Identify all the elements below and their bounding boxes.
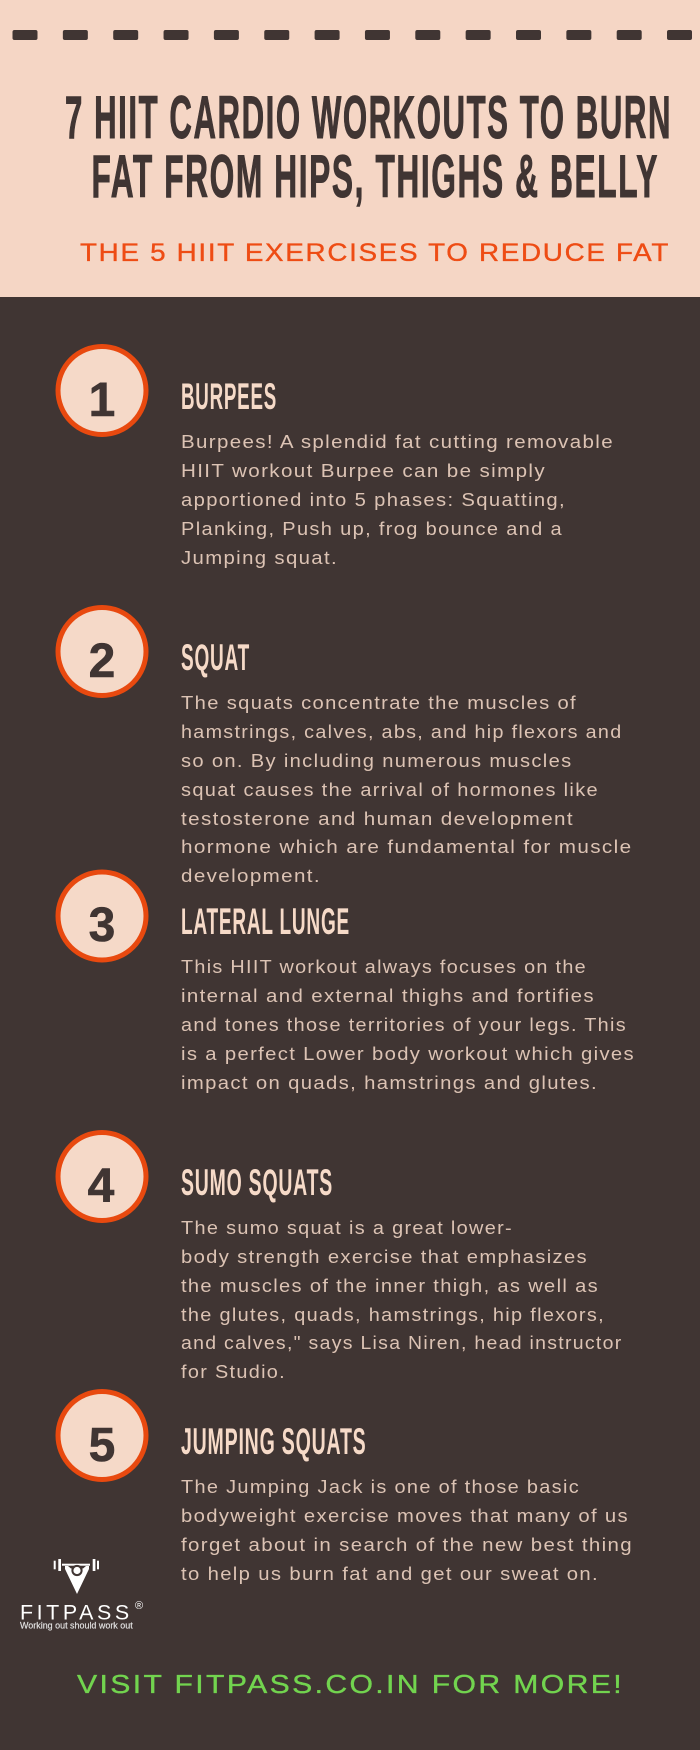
body text 4	[181, 1218, 622, 1382]
body text 2: development.	[181, 866, 321, 886]
body text 3: internal and external thighs and fortifies	[181, 986, 595, 1006]
body text 4: the glutes, quads, hamstrings, hip flexors,	[181, 1305, 605, 1325]
body text 2: The squats concentrate the muscles of	[181, 693, 577, 713]
body text 5	[181, 1477, 633, 1584]
heading: lateral lunge: LATERAL LUNGE	[181, 901, 350, 942]
body text 2: squat causes the arrival of hormones like	[181, 780, 599, 800]
body text 3: and tones those territories of your legs. This	[181, 1015, 627, 1035]
item 4: sumo squats	[58, 1132, 622, 1382]
body text 1: Planking, Push up, frog bounce and a	[181, 519, 563, 539]
body text 2	[181, 693, 632, 886]
body text 5: The Jumping Jack is one of those basic	[181, 1477, 580, 1497]
body text 3: This HIIT workout always focuses on the	[181, 957, 587, 977]
body text 3	[181, 957, 635, 1093]
item 2: squat	[58, 608, 632, 886]
logo tagline: Working out should work out	[20, 1621, 133, 1632]
body text 1	[181, 432, 614, 568]
number badge 1	[58, 346, 146, 434]
fitpass logo	[20, 1559, 143, 1632]
item 5: jumping squats	[58, 1392, 633, 1584]
dashed line	[12, 30, 692, 40]
registered mark: ®	[135, 1600, 143, 1612]
body text 5: forget about in search of the new best thing	[181, 1535, 633, 1555]
number badge 2: 2	[89, 635, 115, 688]
item 3: lateral lunge	[58, 872, 635, 1093]
item 1: burpees	[58, 346, 614, 568]
body text 2: testosterone and human development	[181, 809, 574, 829]
body text 3: is a perfect Lower body workout which gives	[181, 1044, 635, 1064]
body text 1: apportioned into 5 phases: Squatting,	[181, 490, 566, 510]
body text 2: hormone which are fundamental for muscle	[181, 837, 632, 857]
body text 1: Jumping squat.	[181, 548, 338, 568]
number badge 4: 4	[88, 1160, 115, 1213]
body text 2: hamstrings, calves, abs, and hip flexors and	[181, 722, 622, 742]
body text 1: Burpees! A splendid fat cutting removable	[181, 432, 614, 452]
subtitle: THE 5 HIIT EXERCISES TO REDUCE FAT	[80, 239, 670, 267]
heading: burpees: BURPEES	[181, 376, 277, 417]
number badge 5: 5	[89, 1419, 115, 1472]
heading: sumo squats: SUMO SQUATS	[181, 1162, 333, 1203]
body text 4: the muscles of the inner thigh, as well as	[181, 1276, 599, 1296]
icon: barbell with figure	[54, 1559, 99, 1594]
body text 4: The sumo squat is a great lower-	[181, 1218, 513, 1238]
number badge 4	[58, 1132, 146, 1220]
number badge 1: 1	[89, 374, 115, 427]
body text 4: and calves," says Lisa Niren, head instructor	[181, 1333, 622, 1353]
body text 4: body strength exercise that emphasizes	[181, 1247, 588, 1267]
heading: squat: SQUAT	[181, 637, 250, 678]
footer call to action: VISIT FITPASS.CO.IN FOR MORE!	[77, 1671, 624, 1699]
body text 2: so on. By including numerous muscles	[181, 751, 572, 771]
body text 3: impact on quads, hamstrings and glutes.	[181, 1073, 598, 1093]
body text 4: for Studio.	[181, 1362, 286, 1382]
number badge 5	[58, 1392, 146, 1480]
heading: jumping squats: JUMPING SQUATS	[181, 1421, 366, 1462]
number badge 2	[58, 608, 146, 696]
header panel	[0, 0, 700, 297]
body text 5: bodyweight exercise moves that many of us	[181, 1506, 629, 1526]
number badge 3: 3	[89, 899, 115, 952]
logo wordmark: FITPASS	[20, 1601, 133, 1624]
body text 1: HIIT workout Burpee can be simply	[181, 461, 546, 481]
title	[65, 84, 672, 210]
number badge 3	[58, 872, 146, 960]
body text 5: to help us burn fat and get our sweat on.	[181, 1564, 599, 1584]
